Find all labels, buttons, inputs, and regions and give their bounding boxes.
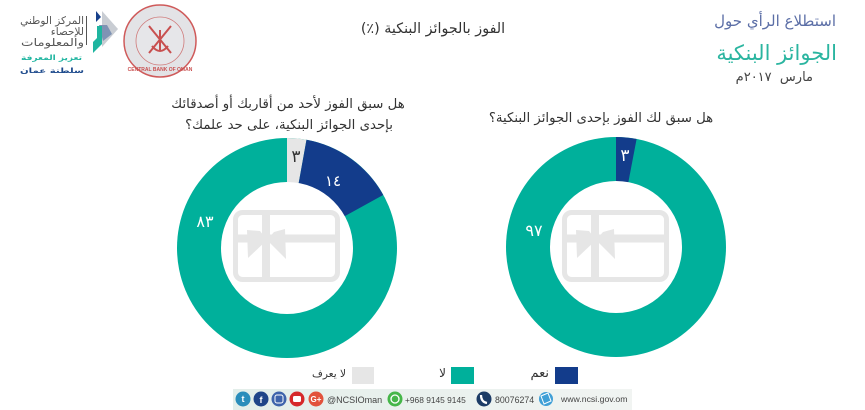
donut chart: right: ٩٧: [525, 221, 543, 240]
left question: [171, 95, 405, 133]
icon: globe: [539, 392, 553, 406]
donut chart: right: [506, 137, 726, 357]
left question: بإحدى الجوائز البنكية، على حد علمك؟: [185, 118, 393, 133]
heading: survey title: [714, 11, 837, 85]
donut chart: left: ٨٣: [196, 212, 214, 231]
icon: gift card: [236, 212, 338, 280]
legend: نعم: [530, 366, 549, 381]
legend: لا يعرف: [312, 368, 346, 380]
heading: survey title: الجوائز البنكية: [716, 41, 837, 65]
logo: Central Bank of Oman seal: CENTRAL BANK OF OMAN: [128, 67, 193, 73]
heading: survey title: مارس ٢٠١٧م: [736, 70, 813, 85]
data labels: ٣: [620, 146, 630, 166]
website: www.ncsi.gov.om: [560, 394, 627, 404]
footer contact bar: [233, 389, 632, 410]
left question: هل سبق الفوز لأحد من أقاربك أو أصدقائك: [171, 95, 405, 112]
social icons: f: [260, 395, 264, 405]
donut chart: left: ١٤: [325, 172, 341, 190]
social icons: [236, 392, 324, 406]
title: الفوز بالجوائز البنكية (٪): [361, 21, 505, 37]
legend: لا: [439, 366, 446, 380]
handle: @NCSIOman: [327, 395, 382, 405]
heading: survey title: استطلاع الرأي حول: [714, 11, 836, 31]
donut chart: left: [177, 138, 397, 358]
logo: NCSI: [20, 11, 118, 75]
phone: +968 9145 9145: [405, 395, 466, 405]
icon: phone: [476, 392, 492, 406]
NCSI name: للإحصاء: [51, 26, 84, 38]
right question: هل سبق لك الفوز بإحدى الجوائز البنكية؟: [489, 111, 713, 126]
social icons: t: [242, 394, 244, 404]
social icons: G+: [311, 395, 322, 404]
logo: NCSI: تعزيز المعرفة: [21, 54, 82, 62]
NCSI name: المركز الوطني: [20, 15, 84, 27]
toll free: 80076274: [495, 395, 534, 405]
logo: Central Bank of Oman seal: [124, 5, 196, 77]
icon: gift card: [564, 212, 666, 280]
legend: [312, 366, 578, 384]
NCSI name: [20, 15, 84, 49]
logo: NCSI: سلطنة عمان: [20, 67, 84, 75]
icon: whatsapp: [388, 392, 402, 406]
NCSI name: والمعلومات: [21, 37, 84, 49]
data labels: ٣: [291, 147, 301, 167]
